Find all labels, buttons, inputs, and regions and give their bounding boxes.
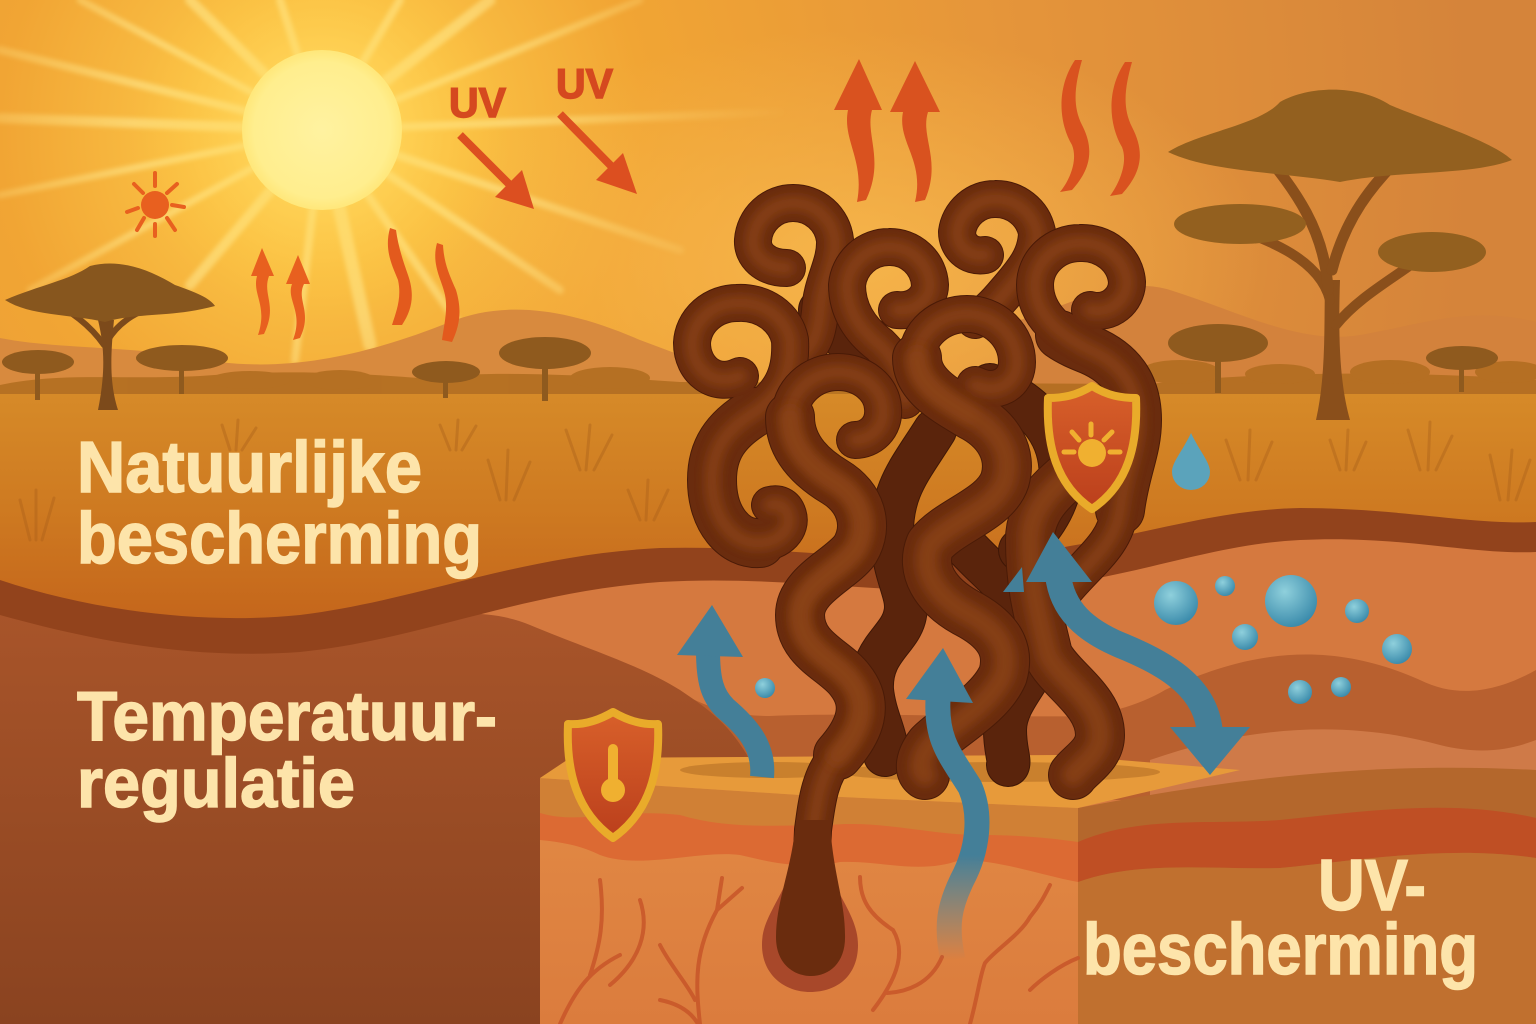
heading: Natuurlijke bescherming: Natuurlijke xyxy=(77,428,422,508)
UV arrow 1 xyxy=(460,135,534,209)
hair bulb xyxy=(776,820,845,976)
strand: centre front xyxy=(917,314,1017,775)
icon: thermometer shield xyxy=(568,712,658,838)
distant hills xyxy=(0,286,1536,420)
heading: UV-bescherming xyxy=(1083,846,1478,990)
heading: Natuurlijke bescherming xyxy=(77,428,482,579)
skin layers: dark wave across xyxy=(650,655,1536,800)
grass tufts xyxy=(20,420,1530,540)
curl: far left double xyxy=(692,303,790,543)
heading: Natuurlijke bescherming: bescherming xyxy=(77,499,482,579)
icon: sun shield xyxy=(1048,386,1136,509)
strand: right lower xyxy=(1030,470,1100,775)
heading: UV-bescherming: bescherming xyxy=(1083,910,1478,990)
UV arrow 2 xyxy=(560,114,637,194)
strand: root front xyxy=(790,372,883,900)
heading: UV-bescherming: UV- xyxy=(1318,846,1426,926)
heading: Temperatuur-regulatie: Temperatuur- xyxy=(77,677,497,755)
sky glow behind hair xyxy=(430,30,1270,490)
deep dermis left xyxy=(0,598,750,1024)
sun glow xyxy=(132,0,512,320)
back strand: J xyxy=(960,540,1040,765)
heading: Temperatuur-regulatie xyxy=(77,677,497,822)
dark skin band xyxy=(0,508,1536,654)
small background trees xyxy=(2,324,1498,401)
acacia tree: left xyxy=(5,263,215,410)
sky background xyxy=(0,0,1536,420)
hair follicle halo xyxy=(762,885,858,992)
acacia tree: large right xyxy=(1168,90,1512,420)
savanna treeline xyxy=(0,360,1536,410)
hair strands xyxy=(692,199,1137,900)
arrow: left moisture xyxy=(677,605,762,777)
curl: top centre-right xyxy=(957,199,1037,320)
skin layers: light dermis background xyxy=(380,521,1536,810)
back strand: link xyxy=(820,310,870,360)
skin layers: right light wave xyxy=(1150,729,1536,800)
heading: Temperatuur-regulatie: regulatie xyxy=(77,744,355,822)
water droplets xyxy=(755,575,1412,704)
heat arrows: small left xyxy=(251,248,310,340)
icon: small sun xyxy=(127,173,184,236)
arrow: right moisture xyxy=(1003,532,1250,775)
skin block top surface xyxy=(540,755,1240,808)
sun xyxy=(242,50,402,210)
curl: top centre xyxy=(847,247,930,400)
skin block front face xyxy=(540,778,1078,1024)
UV label 2: UV xyxy=(556,60,613,107)
heat waves: large top xyxy=(1060,60,1140,196)
UV label 1: UV xyxy=(449,79,506,126)
skin block right face xyxy=(1078,768,1536,1024)
savanna ground xyxy=(0,394,1536,624)
curl: right xyxy=(1035,243,1137,620)
back strand: behind shield xyxy=(990,385,1061,550)
icon: water drop xyxy=(1172,433,1210,490)
arrow: centre moisture xyxy=(906,648,977,960)
heat arrows: large top xyxy=(834,59,940,202)
sun rays xyxy=(0,0,780,360)
heat waves: small xyxy=(388,228,459,342)
curl: top left xyxy=(753,203,835,355)
back strand: H xyxy=(872,430,935,755)
blood vessels xyxy=(560,877,1078,1024)
